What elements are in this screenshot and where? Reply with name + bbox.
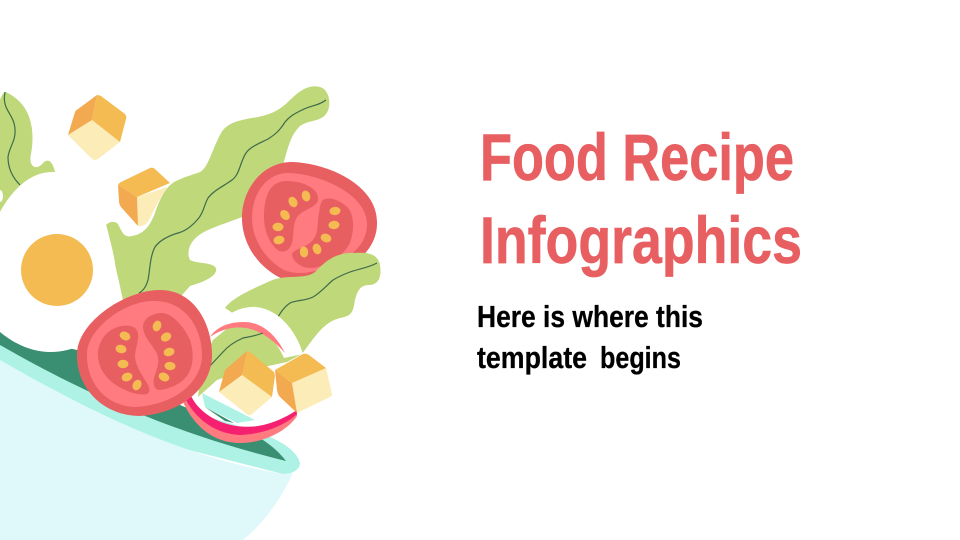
title: Food Recipe (480, 120, 794, 194)
bowl (0, 332, 300, 540)
subtitle: Here is where this (477, 299, 703, 334)
tomato seeds (272, 190, 341, 258)
onion: coral upper band (210, 322, 285, 353)
fried egg (0, 172, 117, 352)
onion: white upper band (208, 307, 303, 358)
leaf vein inside ring (208, 333, 263, 368)
tomato slice: lower left (77, 290, 212, 416)
cheese cube: upper middle (118, 168, 170, 226)
cheese cube: top (68, 95, 126, 160)
cheese cube: front left (219, 351, 275, 415)
subtitle: template (477, 340, 587, 375)
tomato seeds (115, 319, 176, 392)
egg yolk (21, 234, 93, 306)
tomato slice: upper right (242, 162, 377, 281)
title: Infographics (480, 203, 802, 277)
red onion ring (183, 307, 303, 443)
subtitle (477, 299, 703, 375)
title (480, 120, 802, 277)
subtitle: begins (600, 340, 681, 375)
salad bowl illustration (0, 86, 381, 540)
cheese cube: front right (275, 354, 332, 413)
leaf: top left (0, 92, 55, 215)
leaf: lower right lettuce (198, 253, 381, 397)
bowl remnant inside ring (202, 393, 255, 423)
onion: coral and pink lower band (183, 397, 297, 443)
leaf: large lettuce (105, 86, 329, 320)
